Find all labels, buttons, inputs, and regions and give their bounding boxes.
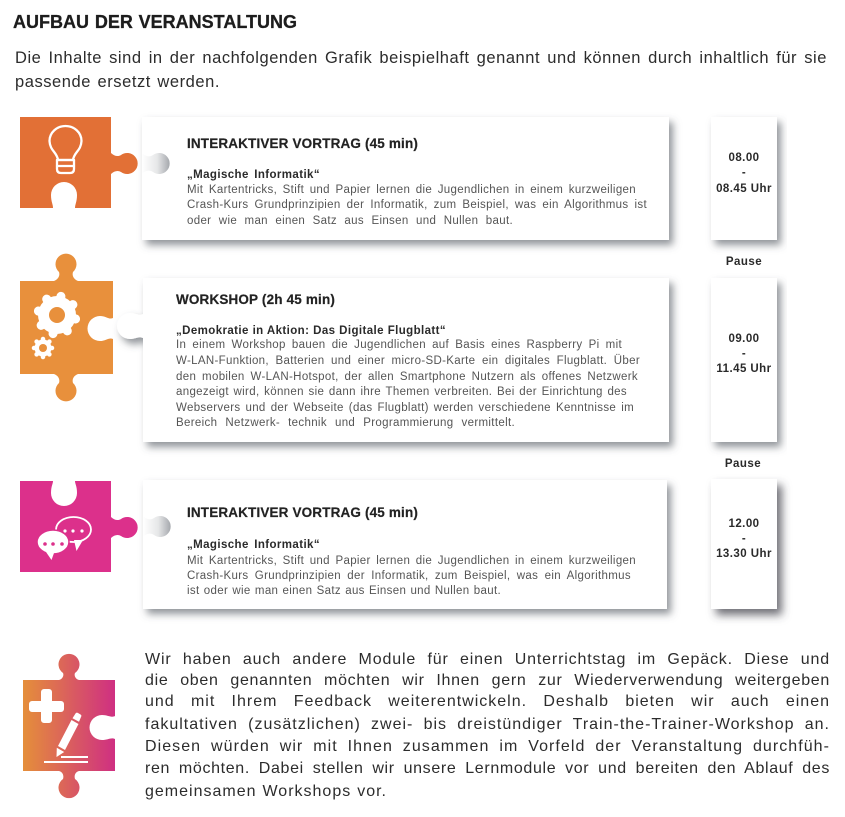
text block: lecture 2: Crash-Kurs Grundprinzipien der Informatik, zum Beispiel, was ein Algorithmus [187, 570, 631, 582]
time label 3: 13.30 Uhr [716, 548, 772, 560]
icon: plus [29, 689, 64, 723]
puzzle piece: plus and pencil [23, 654, 115, 798]
pause label 2: Pause [725, 458, 761, 470]
text block: workshop: WORKSHOP (2h 45 min) [176, 292, 335, 307]
icon: outlined speech bubble [56, 517, 91, 551]
puzzle piece: speech bubbles [20, 481, 138, 572]
text block: workshop: angezeigt wird, können sie dann ihre Themen verbreiten. Bei der Einrichtung des [176, 386, 627, 398]
time label 2: 09.00 [728, 333, 760, 345]
text block: lecture 1: Crash-Kurs Grundprinzipien der Informatik, zum Beispiel, was ein Algorithmus ist [187, 199, 647, 211]
closing paragraph: gemeinsamen Workshops vor. [145, 783, 387, 800]
panel: time 1 [711, 117, 777, 240]
text block: lecture 2 [187, 505, 636, 597]
text block: lecture 1 [187, 136, 647, 227]
closing paragraph: fakultativen (zusätzlichen) zwei- bis dreistündiger Train-the-Trainer-Workshop an. [145, 716, 830, 733]
panel: interactive lecture 1 [142, 117, 669, 240]
title: AUFBAU DER VERANSTALTUNG [13, 12, 297, 32]
closing paragraph [145, 651, 830, 800]
closing paragraph: Diesen würden wir mit Ihnen zusammen im Vorfeld der Veranstaltung durchfüh- [145, 738, 830, 755]
time label 1: - [742, 167, 746, 179]
closing paragraph: Wir haben auch andere Module für einen Unterrichtstag im Gepäck. Diese und [145, 651, 830, 668]
closing paragraph: die oben genannten möchten wir Ihnen gern zur Wiederverwendung weitergeben [145, 672, 830, 689]
time label 1 [716, 152, 772, 195]
intro text [15, 49, 827, 91]
time label 2 [716, 333, 772, 375]
time label 3 [716, 518, 772, 560]
text block: lecture 2: Mit Kartentricks, Stift und Papier lernen die Jugendlichen in einem kurzweiligen [187, 555, 636, 567]
text block: lecture 1: oder wie man einen Satz aus Einsen und Nullen baut. [187, 215, 513, 227]
text block: lecture 1: INTERAKTIVER VORTRAG (45 min) [187, 136, 418, 151]
panel: time 2 [711, 278, 777, 442]
pause label 1: Pause [726, 256, 762, 268]
text block: lecture 1: „Magische Informatik“ [187, 169, 320, 181]
icon: light bulb [50, 126, 82, 173]
text block: workshop: Webservers und der Webseite (das Flugblatt) werden verschiedene Kenntnisse im [176, 402, 634, 414]
time label 3: - [742, 533, 746, 545]
text block: workshop: „Demokratie in Aktion: Das Digitale Flugblatt“ [176, 325, 446, 337]
panel: interactive lecture 2 [143, 480, 667, 609]
text block: lecture 2: „Magische Informatik“ [187, 539, 320, 551]
puzzle piece: light bulb [20, 117, 138, 208]
text block: workshop: Bereich Netzwerk- technik und Programmierung vermittelt. [176, 417, 515, 429]
icon: small gear [34, 339, 52, 357]
panel: workshop [117, 278, 669, 442]
text block: workshop: den mobilen W-LAN-Hotspot, der allen Smartphone Nutzern als offenes Netzwerk [176, 371, 638, 383]
intro text: Die Inhalte sind in der nachfolgenden Grafik beispielhaft genannt und können durch inhaltlich für sie [15, 49, 827, 67]
text block: lecture 2: ist oder wie man einen Satz aus Einsen und Nullen baut. [187, 585, 501, 597]
text block: workshop: In einem Workshop bauen die Jugendlichen auf Basis eines Raspberry Pi mit [176, 339, 622, 351]
intro text: passende ersetzt werden. [15, 73, 220, 91]
time label 3: 12.00 [728, 518, 760, 530]
time label 2: 11.45 Uhr [716, 363, 772, 375]
time label 1: 08.45 Uhr [716, 183, 772, 195]
closing paragraph: ren möchten. Dabei stellen wir unsere Lernmodule vor und bereiten den Ablauf des [145, 760, 830, 777]
icon: pencil [44, 713, 88, 763]
time label 1: 08.00 [728, 152, 760, 164]
time label 2: - [742, 348, 746, 360]
text block: workshop [176, 292, 640, 429]
panel: time 3 [711, 479, 777, 609]
icon: filled speech bubble [37, 530, 69, 560]
puzzle piece: gears [20, 254, 113, 401]
closing paragraph: und mit Ihrem Feedback weiterentwickeln. Deshalb bieten wir auch einen [145, 693, 830, 710]
icon: large gear [34, 292, 80, 338]
text block: lecture 2: INTERAKTIVER VORTRAG (45 min) [187, 505, 418, 520]
text block: workshop: W-LAN-Funktion, Batterien und einer micro-SD-Karte ein digitales Flugblatt. Über [176, 355, 640, 367]
text block: lecture 1: Mit Kartentricks, Stift und Papier lernen die Jugendlichen in einem kurzweiligen [187, 184, 636, 196]
